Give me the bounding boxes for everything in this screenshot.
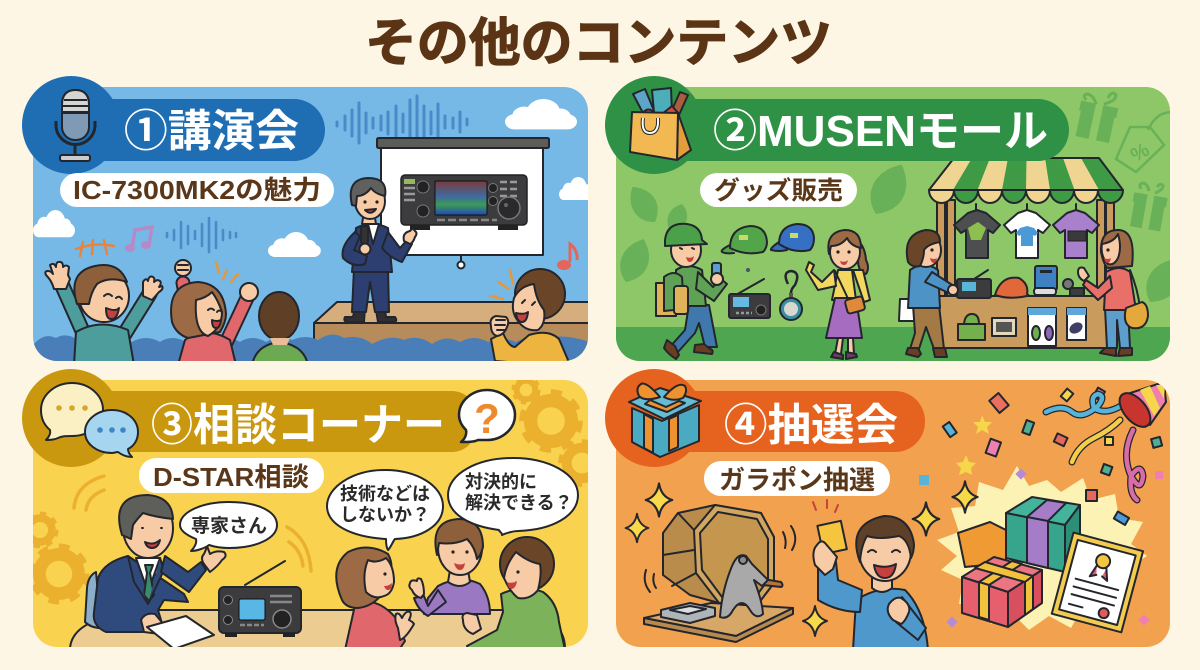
header 3 bar	[65, 391, 476, 452]
icon: question bubble: ?	[474, 395, 500, 442]
radio waves	[74, 476, 311, 571]
gesture lines	[216, 262, 513, 299]
panel 1 background	[33, 87, 588, 361]
icon: chat bubbles	[41, 383, 138, 457]
ground	[616, 327, 1170, 363]
pill 2: グッズ販売	[714, 176, 843, 205]
t-shirt dark	[954, 210, 1000, 258]
goods: caps, radio, keychain	[722, 224, 814, 320]
pill 3: D-STAR相談	[153, 462, 309, 492]
heading 4: ④抽選会	[724, 401, 898, 450]
bubble: question two: 対決的に	[465, 472, 537, 492]
table	[937, 296, 1107, 348]
woman in pink	[336, 547, 414, 653]
panel: consultation	[22, 369, 603, 653]
icon: shopping bag	[630, 88, 691, 160]
boy with card	[813, 500, 928, 650]
paper	[147, 616, 214, 649]
panel 2 background	[616, 87, 1170, 361]
leaves	[616, 158, 1188, 310]
panel: MUSEN mall	[605, 76, 1188, 363]
orange box	[958, 522, 1006, 567]
sound wave upper	[337, 96, 467, 148]
bubble: expert	[180, 502, 277, 551]
pill 2	[700, 173, 857, 207]
header 3 circle	[22, 369, 120, 467]
panel: lecture	[22, 76, 595, 367]
sound wave lower	[167, 218, 236, 252]
shopper with cap	[656, 224, 727, 359]
header 1 circle	[22, 76, 120, 174]
customer in blue	[899, 230, 958, 357]
t-shirt purple	[1053, 210, 1099, 258]
music note purple	[125, 227, 152, 252]
bubble: question one: 技術などは	[340, 483, 430, 504]
stall	[929, 158, 1123, 348]
bubble: question one	[327, 470, 443, 550]
heading 2: ②MUSENモール	[713, 107, 1048, 156]
t-shirt white	[1004, 210, 1050, 258]
bubble: question two: 解決できる？	[465, 493, 573, 513]
audience person pink	[171, 260, 258, 365]
header 4 circle	[605, 369, 703, 467]
customer in pink	[1078, 230, 1148, 356]
streamers	[1046, 394, 1143, 500]
table goods	[957, 266, 1086, 346]
pill 4: ガラポン抽選	[719, 465, 875, 495]
icon: microphone	[56, 90, 95, 161]
presenter	[342, 178, 416, 322]
woman in yellow	[806, 230, 870, 359]
projector screen	[377, 138, 549, 268]
person in purple	[409, 519, 490, 616]
expert	[85, 495, 226, 634]
tag outline	[1116, 112, 1172, 172]
tag outline: %	[1127, 139, 1154, 167]
pink gift	[962, 557, 1042, 627]
confetti	[919, 388, 1163, 628]
sparkles	[626, 481, 978, 636]
audience person green back	[252, 292, 308, 365]
pill 1: IC-7300MK2の魅力	[73, 175, 321, 205]
bubble: expert: 専家さん	[191, 515, 267, 537]
header 1 bar	[60, 99, 325, 161]
bubble: question one: しないか？	[340, 505, 430, 525]
teal gift	[1006, 497, 1080, 572]
radio on screen	[401, 175, 527, 230]
heading 1: ①講演会	[124, 107, 299, 156]
clouds	[33, 99, 595, 257]
gears	[24, 377, 603, 600]
icon: gift box	[629, 384, 701, 457]
panel 4 background	[616, 380, 1170, 647]
crowd silhouette	[33, 334, 590, 361]
header 4 bar	[650, 391, 925, 452]
stage	[314, 302, 590, 353]
certificate	[1052, 533, 1143, 632]
radio	[219, 561, 301, 637]
lottery machine	[644, 505, 795, 642]
pill 3	[139, 458, 324, 493]
panel: lottery	[605, 369, 1170, 650]
icon: question bubble	[459, 390, 515, 442]
prize burst	[937, 466, 1147, 630]
party popper	[1114, 382, 1166, 432]
audience person teal	[45, 262, 163, 365]
header 2 circle	[605, 76, 703, 174]
faded gifts and tag	[1074, 93, 1168, 232]
header 2 bar	[650, 99, 1069, 161]
panel 3 background	[33, 380, 588, 647]
music note red	[557, 244, 577, 270]
audience person yellow	[491, 269, 571, 367]
person in green	[462, 537, 565, 650]
heading 3: ③相談コーナー	[151, 401, 445, 450]
orange scribble	[76, 240, 114, 256]
table	[70, 610, 565, 650]
title: その他のコンテンツ	[365, 15, 832, 73]
bubble: question two	[448, 458, 578, 535]
